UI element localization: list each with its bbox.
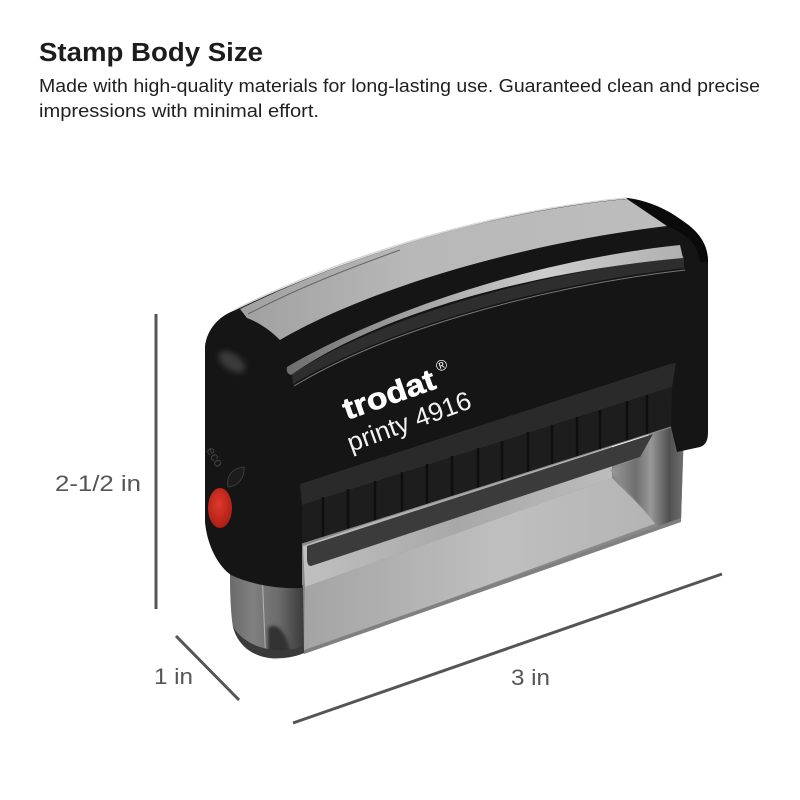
model name: printy 4916 [343, 385, 475, 458]
dimension: depth: 1 in [154, 664, 193, 689]
description text [39, 75, 760, 121]
dimension: depth [154, 636, 239, 700]
stamp illustration [203, 198, 708, 658]
recessed slider area [300, 363, 676, 505]
dimension: width: 3 in [511, 665, 550, 690]
clear base of stamp [230, 425, 684, 658]
registered mark: ® [434, 356, 450, 376]
left cap highlight [215, 347, 249, 377]
eco label: eco [203, 444, 227, 470]
leaf mark [228, 467, 244, 487]
red button [208, 488, 232, 528]
trodat logo: trodat [338, 363, 440, 427]
slider tab [307, 434, 653, 566]
dimension: height: 2-1/2 in [55, 471, 141, 496]
description text: impressions with minimal effort. [39, 100, 319, 121]
glossy highlight and glass [292, 256, 684, 384]
top grey window [240, 199, 667, 340]
dimension: width [293, 574, 722, 723]
description text: Made with high-quality materials for long-lasting use. Guaranteed clean and precise [39, 75, 760, 96]
title: Stamp Body Size [39, 39, 263, 67]
black body [205, 198, 708, 588]
ribbed index band [302, 387, 672, 544]
right cap edge [627, 198, 708, 262]
